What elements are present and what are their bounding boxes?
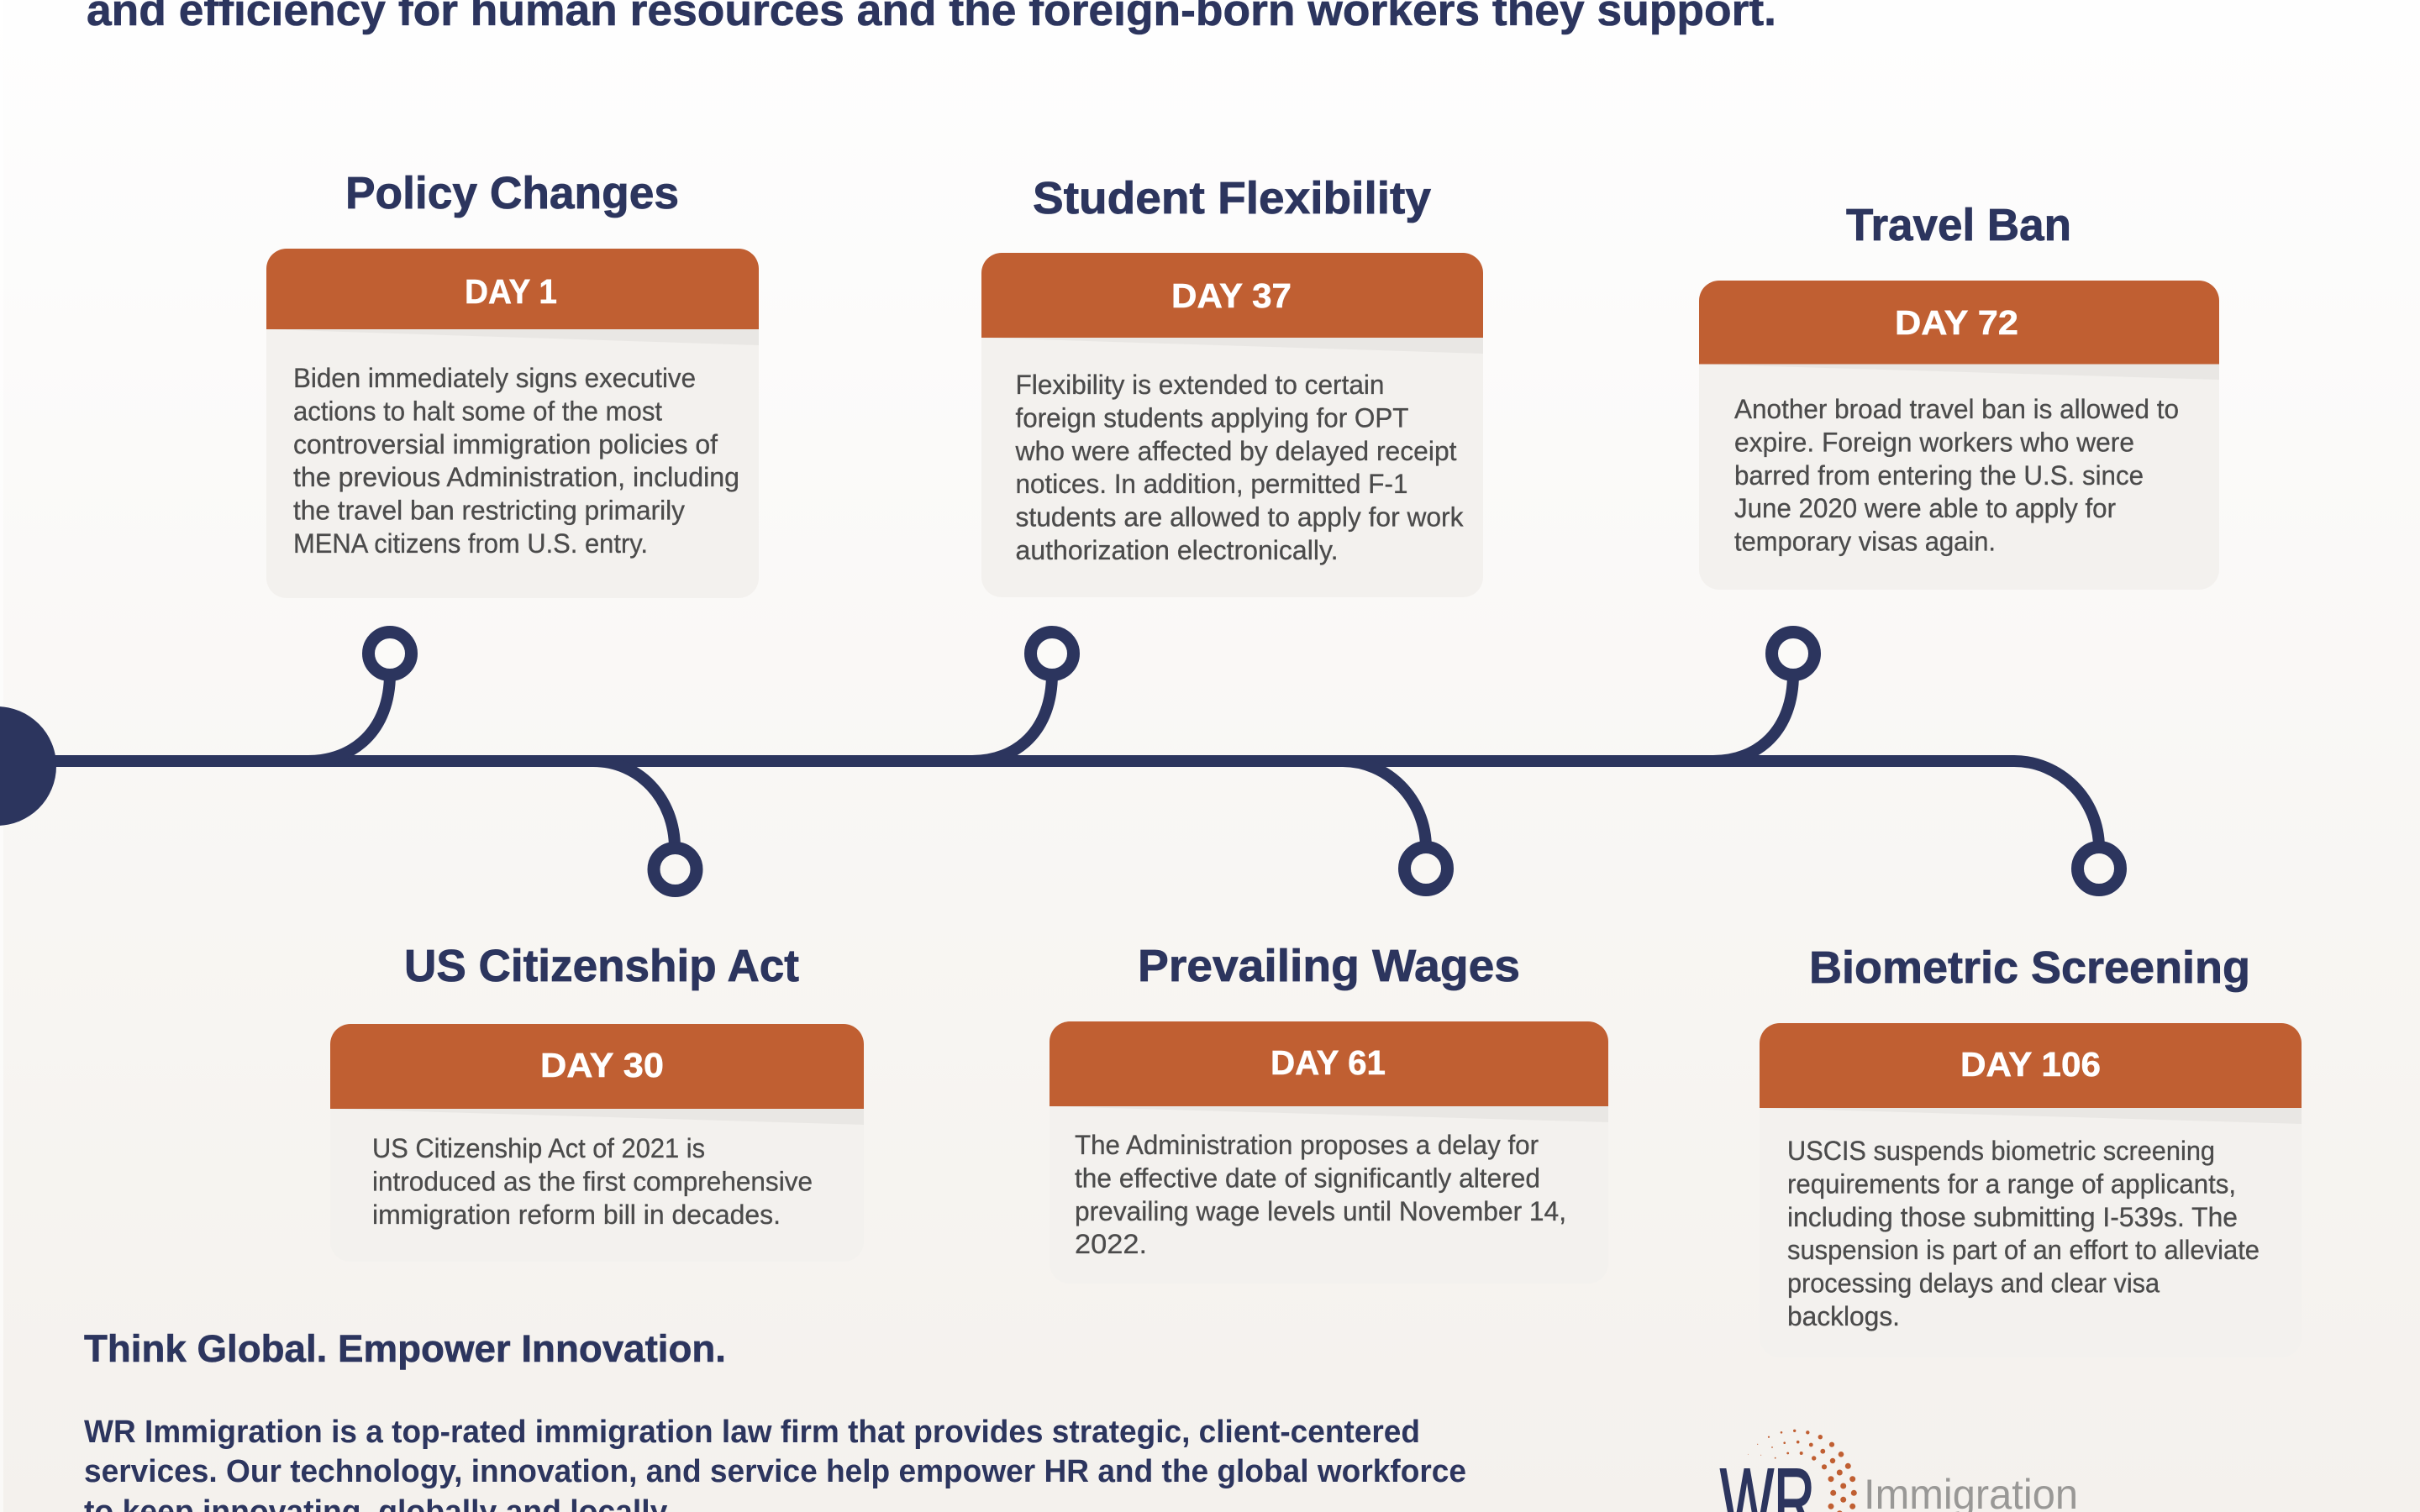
header shadow wedge [1760, 1108, 2302, 1124]
card body [981, 253, 1483, 597]
description: controversial immigration policies of [293, 429, 718, 459]
heading: Biometric Screening: Biometric Screening [1809, 942, 2250, 993]
panel: US Citizenship Act [330, 941, 864, 1262]
description: notices. In addition, permitted F-1 [1015, 469, 1408, 499]
footer description: WR Immigration is a top-rated immigration law firm that provides strategic, client-centered [84, 1415, 1420, 1450]
panel: Student Flexibility [981, 173, 1483, 597]
description: introduced as the first comprehensive [372, 1166, 813, 1196]
marker ring: Biometric Screening [2077, 847, 2121, 890]
logo: WR Immigration [1720, 1430, 2078, 1512]
card body [1699, 281, 2219, 590]
description: requirements for a range of applicants, [1787, 1168, 2236, 1199]
description: 2022. [1075, 1229, 1147, 1259]
description: expire. Foreign workers who were [1734, 427, 2134, 457]
marker ring: Prevailing Wages [1405, 847, 1447, 890]
panel: Prevailing Wages [1050, 941, 1608, 1284]
heading: Prevailing Wages: Prevailing Wages [1138, 941, 1520, 991]
heading: Policy Changes: Policy Changes [345, 168, 679, 218]
header shadow wedge [981, 338, 1483, 354]
day header [1760, 1023, 2302, 1108]
description: prevailing wage levels until November 14, [1075, 1196, 1566, 1226]
footer description: services. Our technology, innovation, and service help empower HR and the global workforce [84, 1454, 1466, 1489]
day header [1050, 1021, 1608, 1106]
description: Flexibility is extended to certain [1015, 370, 1385, 400]
timeline spine with branches [0, 674, 2099, 848]
description: the travel ban restricting primarily [293, 496, 685, 526]
marker ring: Policy Changes [368, 632, 412, 675]
footer tagline: Think Global. Empower Innovation. [84, 1327, 726, 1370]
description: authorization electronically. [1015, 535, 1338, 565]
marker ring: Student Flexibility [1030, 632, 1074, 675]
description: the effective date of significantly altered [1075, 1163, 1540, 1193]
day label: DAY 72 [1895, 303, 2018, 342]
description [293, 363, 739, 559]
description: The Administration proposes a delay for [1075, 1130, 1539, 1160]
description [1075, 1130, 1566, 1259]
heading: US Citizenship Act: US Citizenship Act [404, 941, 799, 991]
description: Biden immediately signs executive [293, 363, 696, 393]
description: suspension is part of an effort to alleviate [1787, 1235, 2260, 1265]
marker ring: Travel Ban [1771, 632, 1815, 675]
marker ring: US Citizenship Act [654, 848, 697, 890]
description: students are allowed to apply for work [1015, 502, 1464, 533]
description: barred from entering the U.S. since [1734, 460, 2144, 491]
footer description [84, 1415, 1466, 1512]
day label: DAY 1 [465, 272, 557, 311]
day label: DAY 37 [1171, 276, 1292, 315]
description: temporary visas again. [1734, 527, 1996, 557]
description: June 2020 were able to apply for [1734, 493, 2116, 523]
card body [1050, 1021, 1608, 1284]
day label: DAY 61 [1270, 1043, 1386, 1082]
day header [981, 253, 1483, 338]
panel: Travel Ban [1699, 200, 2219, 590]
day label: DAY 106 [1960, 1045, 2101, 1084]
heading: Travel Ban: Travel Ban [1846, 200, 2071, 250]
description [1015, 370, 1464, 565]
header shadow wedge [330, 1109, 864, 1125]
day header [266, 249, 759, 329]
description: USCIS suspends biometric screening [1787, 1136, 2215, 1166]
description: MENA citizens from U.S. entry. [293, 528, 648, 559]
card body [266, 249, 759, 598]
description: who were affected by delayed receipt [1015, 436, 1457, 466]
panel: Policy Changes [266, 168, 759, 598]
description: including those submitting I-539s. The [1787, 1202, 2238, 1232]
description [372, 1133, 813, 1230]
description: foreign students applying for OPT [1015, 402, 1408, 433]
description: processing delays and clear visa [1787, 1268, 2160, 1299]
day label: DAY 30 [540, 1046, 664, 1084]
description: immigration reform bill in decades. [372, 1200, 781, 1230]
header shadow wedge [1050, 1106, 1608, 1122]
panel: Biometric Screening [1760, 942, 2302, 1357]
logo dots [1748, 1430, 1857, 1512]
header shadow wedge [1699, 365, 2219, 380]
description: actions to halt some of the most [293, 396, 662, 426]
header shadow wedge [266, 329, 759, 345]
card body [330, 1024, 864, 1262]
description: US Citizenship Act of 2021 is [372, 1133, 705, 1163]
card body [1760, 1023, 2302, 1357]
description: backlogs. [1787, 1301, 1900, 1331]
day header [330, 1024, 864, 1109]
description: the previous Administration, including [293, 462, 739, 492]
day header [1699, 281, 2219, 365]
description [1734, 394, 2179, 557]
description [1787, 1136, 2260, 1331]
heading: Student Flexibility: Student Flexibility [1033, 173, 1431, 223]
description: Another broad travel ban is allowed to [1734, 394, 2179, 424]
